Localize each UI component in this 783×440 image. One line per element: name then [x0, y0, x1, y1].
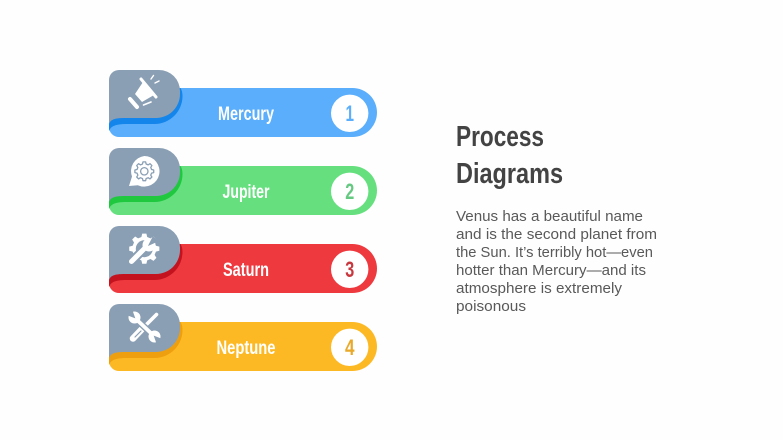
tab shadow: Mercury: [109, 88, 182, 131]
tab shadow: Neptune: [109, 322, 182, 365]
text block: description: and is the second planet from: [456, 227, 657, 243]
title: Diagrams: [456, 158, 563, 190]
panel: Neptune step: [109, 304, 377, 371]
text block: description: hotter than Mercury—and its: [456, 263, 646, 279]
tab: Saturn: [109, 226, 180, 280]
label: Saturn: Saturn: [223, 260, 269, 281]
bar: Jupiter: [109, 166, 377, 215]
panel: Saturn step: [109, 226, 377, 293]
number badge: 4: 4: [345, 335, 355, 360]
tab: Jupiter: [109, 148, 180, 202]
tab: Mercury: [109, 70, 180, 124]
label: Neptune: Neptune: [216, 338, 276, 359]
icon: megaphone: [130, 76, 159, 107]
tab: Neptune: [109, 304, 180, 358]
number badge: 4: [331, 329, 368, 366]
text block: description: Venus has a beautiful name: [456, 209, 643, 225]
bar: Neptune: [109, 322, 377, 371]
title: Process: [456, 121, 544, 153]
label: Mercury: Mercury: [218, 104, 274, 125]
text block: description: atmosphere is extremely: [456, 281, 623, 297]
label: Jupiter: Jupiter: [222, 182, 270, 203]
text block: description: poisonous: [456, 299, 526, 315]
tab shadow: Saturn: [109, 244, 182, 287]
text block: description: the Sun. It’s terribly hot—even: [456, 245, 653, 261]
number badge: 1: 1: [345, 101, 354, 126]
number badge: 2: [331, 173, 368, 210]
title: [456, 121, 563, 190]
number badge: 1: [331, 95, 368, 132]
bar: Mercury: [109, 88, 377, 137]
tab shadow: Jupiter: [109, 166, 182, 209]
icon: gear speech bubble: [129, 156, 159, 187]
number badge: 2: 2: [345, 179, 354, 204]
number badge: 3: [331, 251, 368, 288]
icon: wrench in gear: [128, 234, 159, 265]
panel: Mercury step: [109, 70, 377, 137]
text block: description: [456, 209, 657, 315]
icon: crossed wrench and screwdriver: [128, 310, 161, 344]
panel: Jupiter step: [109, 148, 377, 215]
bar: Saturn: [109, 244, 377, 293]
number badge: 3: 3: [345, 257, 354, 282]
